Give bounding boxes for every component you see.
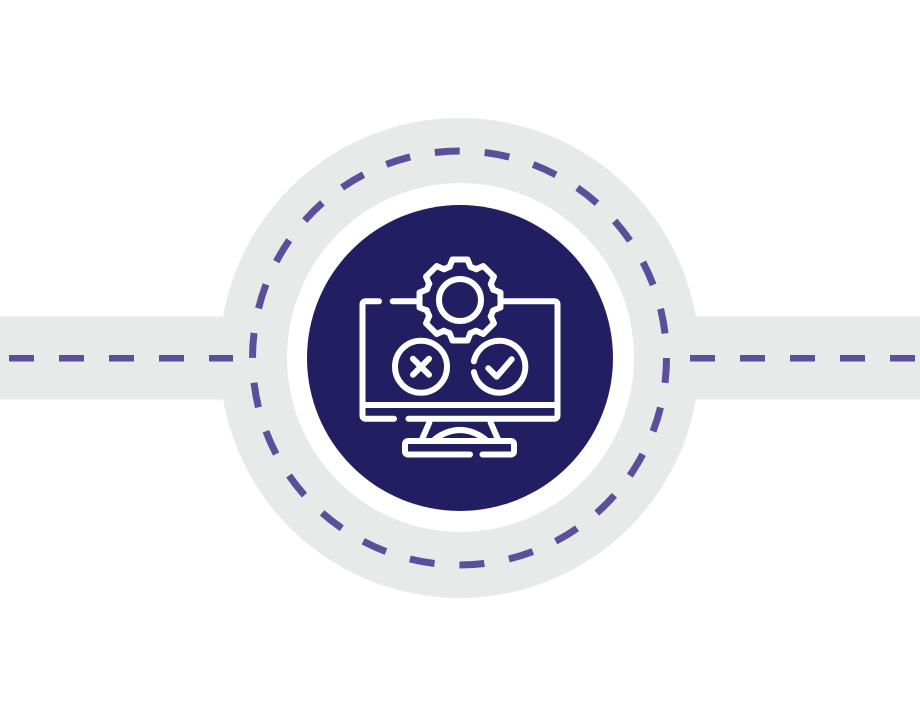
right road dashes bbox=[690, 355, 915, 362]
icon: cross in circle bbox=[395, 341, 447, 393]
right road band bbox=[680, 316, 920, 400]
icon: monitor stand bbox=[405, 423, 514, 454]
icon: monitor with gear and test results bbox=[362, 260, 558, 454]
grey ring bbox=[220, 118, 700, 598]
icon: monitor body bbox=[362, 301, 558, 419]
left road band bbox=[0, 316, 240, 400]
icon: gear bbox=[420, 260, 500, 340]
navy circle bbox=[307, 205, 613, 511]
left road dashes bbox=[9, 355, 233, 362]
dashed ring line bbox=[252, 151, 666, 565]
white inner disc bbox=[287, 183, 634, 532]
icon: check mark in circle bbox=[474, 341, 525, 393]
